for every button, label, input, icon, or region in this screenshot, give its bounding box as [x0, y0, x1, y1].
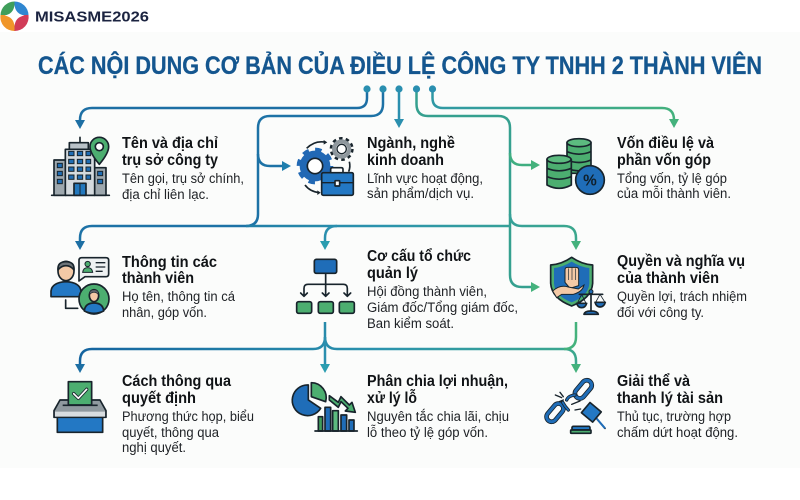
- card: Cách thông qua quyết định: quyết, thông qua: [122, 425, 219, 440]
- card: Tên và địa chỉ: địa chỉ liên lạc.: [122, 187, 209, 202]
- card: Quyền và nghĩa vụ của thành viên: của thành viên: [617, 270, 719, 287]
- icon: pie chart, falling arrow and bars: [292, 383, 357, 431]
- card: Cách thông qua quyết định: Phương thức họp, biểu: [122, 409, 254, 424]
- card: Vốn điều lệ và phần vốn góp: Tổng vốn, tỷ lệ góp: [617, 171, 727, 186]
- icon: office building with pin: [52, 137, 109, 195]
- card: Tên và địa chỉ: Tên gọi, trụ sở chính,: [122, 171, 244, 186]
- card: Ngành, nghề kinh doanh: kinh doanh: [367, 152, 444, 169]
- card: Quyền và nghĩa vụ của thành viên: đối với công ty.: [617, 305, 704, 320]
- card: Phân chia lợi nhuận, xử lý lỗ: [292, 373, 509, 440]
- card: Thông tin các thành viên: nhân, góp vốn.: [122, 305, 207, 320]
- connector network: [75, 85, 679, 373]
- card: Thông tin các thành viên: thành viên: [122, 270, 194, 287]
- icon: coin stacks with percent badge: %: [583, 172, 597, 189]
- icon: coin stacks with percent badge: [547, 139, 604, 194]
- card: Phân chia lợi nhuận, xử lý lỗ: Phân chia lợi nhuận,: [367, 373, 508, 390]
- card: Giải thể và thanh lý tài sản: Giải thể và: [617, 372, 690, 390]
- card: Cách thông qua quyết định: quyết định: [122, 390, 196, 407]
- card: Vốn điều lệ và phần vốn góp: [547, 135, 731, 201]
- card: Vốn điều lệ và phần vốn góp: phần vốn góp: [617, 152, 711, 169]
- logo: MISASME2026: [0, 1, 149, 31]
- card: Thông tin các thành viên: [51, 254, 235, 320]
- card: Cơ cấu tổ chức quản lý: [297, 247, 518, 331]
- card: Quyền và nghĩa vụ của thành viên: Quyền và nghĩa vụ: [617, 253, 745, 270]
- logo: MISASME2026: MISASME2026: [35, 10, 149, 26]
- icon: members with profile card: [51, 258, 109, 314]
- card: Cách thông qua quyết định: nghị quyết.: [122, 440, 186, 455]
- icon: gears and briefcase: [299, 139, 353, 195]
- card: Cơ cấu tổ chức quản lý: Ban kiểm soát.: [367, 316, 454, 331]
- card: Tên và địa chỉ: Tên và địa chỉ: [122, 135, 219, 152]
- card: Giải thể và thanh lý tài sản: [545, 372, 738, 440]
- icon: shield, hand and scales: [551, 257, 605, 314]
- card: Cơ cấu tổ chức quản lý: quản lý: [367, 265, 418, 282]
- card: Ngành, nghề kinh doanh: Lĩnh vực hoạt động,: [367, 171, 483, 186]
- card: Ngành, nghề kinh doanh: Ngành, nghề: [367, 135, 455, 152]
- card: Giải thể và thanh lý tài sản: thanh lý tài sản: [617, 390, 723, 407]
- card: Tên và địa chỉ: trụ sở công ty: [122, 152, 218, 169]
- icon: ballot box: [54, 382, 106, 432]
- icon: logo circle: [0, 1, 29, 31]
- card: Ngành, nghề kinh doanh: sản phẩm/dịch vụ.: [367, 186, 474, 201]
- card: Phân chia lợi nhuận, xử lý lỗ: lỗ theo tỷ lệ góp vốn.: [367, 425, 488, 440]
- card: Thông tin các thành viên: Thông tin các: [122, 254, 217, 271]
- card: Tên và địa chỉ: [52, 135, 244, 202]
- card: Vốn điều lệ và phần vốn góp: của mỗi thành viên.: [617, 186, 731, 201]
- card: Giải thể và thanh lý tài sản: chấm dứt hoạt động.: [617, 425, 738, 440]
- card: Thông tin các thành viên: Họ tên, thông tin cá: [122, 289, 235, 304]
- card: Cơ cấu tổ chức quản lý: Giám đốc/Tổng giám đốc,: [367, 300, 518, 315]
- card: Giải thể và thanh lý tài sản: Thủ tục, trường hợp: [617, 409, 731, 424]
- card: Cách thông qua quyết định: Cách thông qua: [122, 373, 231, 390]
- card: Cách thông qua quyết định: [54, 373, 254, 455]
- card: Cơ cấu tổ chức quản lý: Hội đồng thành viên,: [367, 284, 487, 299]
- card: Vốn điều lệ và phần vốn góp: Vốn điều lệ và: [617, 135, 714, 152]
- card: Phân chia lợi nhuận, xử lý lỗ: Nguyên tắc chia lãi, chịu: [367, 409, 509, 424]
- icon: broken chain and gavel: [545, 378, 605, 433]
- card: Quyền và nghĩa vụ của thành viên: [551, 253, 747, 320]
- card: Quyền và nghĩa vụ của thành viên: Quyền lợi, trách nhiệm: [617, 289, 747, 304]
- card: Cơ cấu tổ chức quản lý: Cơ cấu tổ chức: [367, 247, 471, 265]
- card: Phân chia lợi nhuận, xử lý lỗ: xử lý lỗ: [367, 388, 417, 407]
- icon: org chart: [297, 259, 354, 313]
- card: Ngành, nghề kinh doanh: [299, 135, 483, 201]
- arrowheads: [75, 119, 679, 373]
